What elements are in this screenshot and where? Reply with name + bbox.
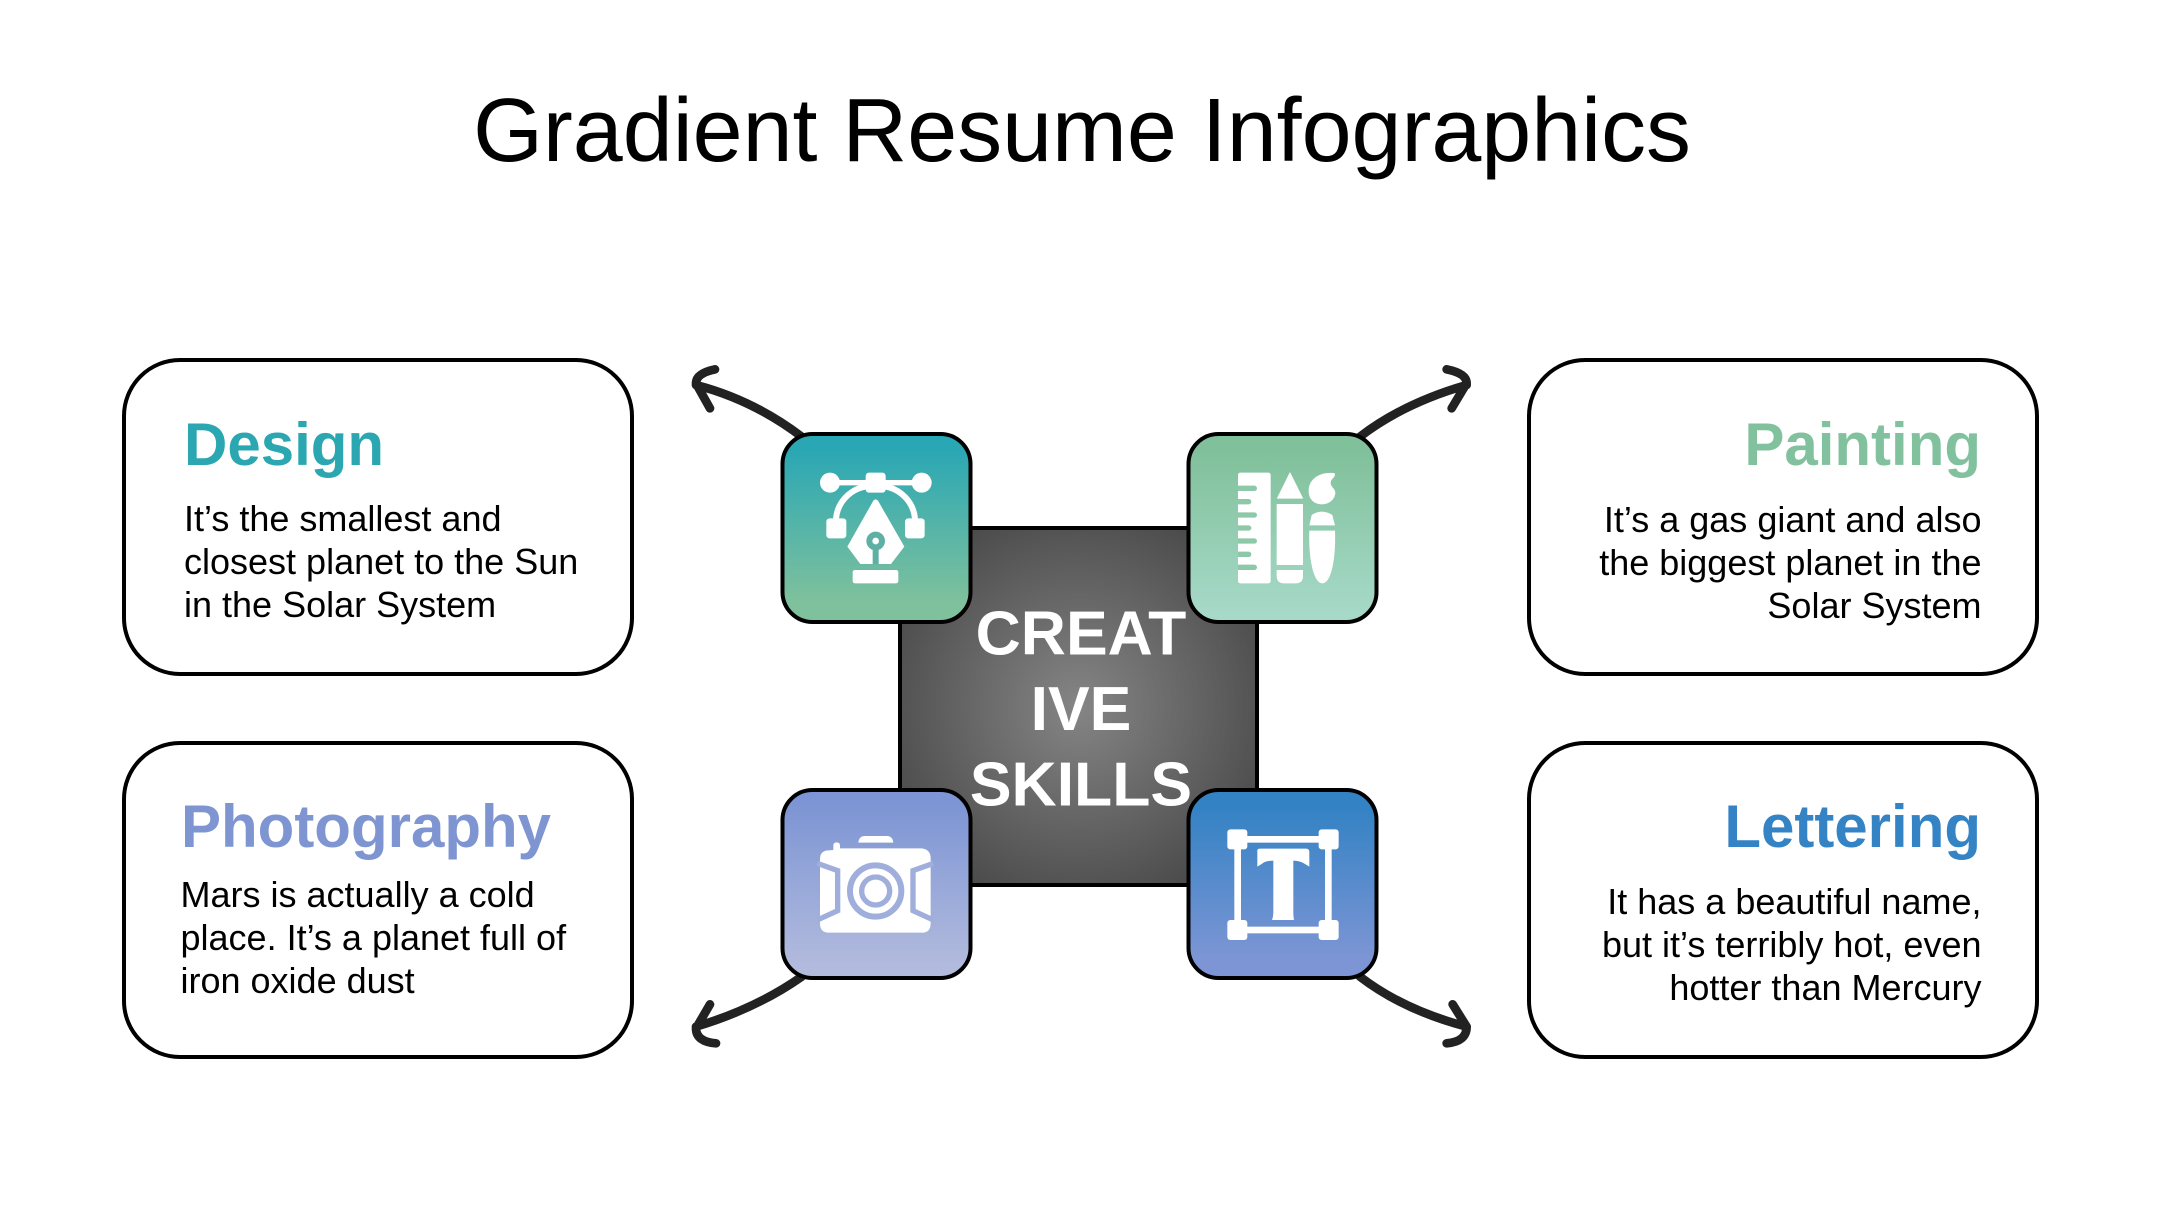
arrow: to painting: [1360, 369, 1467, 437]
text: photography description: iron oxide dust: [180, 960, 415, 1001]
center label: IVE: [1031, 674, 1131, 744]
arrow: to lettering: [1360, 977, 1467, 1043]
text: painting description: It’s a gas giant and also: [1604, 499, 1982, 540]
heading: lettering: Lettering: [1724, 793, 1981, 860]
text: painting description: Solar System: [1767, 585, 1982, 626]
center square: creative skills: [900, 528, 1257, 885]
arrow: to design: [696, 369, 802, 437]
title: Gradient Resume Infographics: [473, 81, 1691, 181]
text: design description: It’s the smallest and: [184, 498, 502, 539]
text: lettering description: hotter than Mercury: [1669, 967, 1982, 1008]
arrow: to photography: [696, 977, 802, 1043]
panel: lettering: [1529, 743, 2037, 1057]
panel: painting: [1529, 360, 2037, 674]
text: painting description: [1599, 499, 1982, 626]
panel: design: [124, 360, 632, 674]
panel: photography: [124, 743, 632, 1057]
text: lettering description: but it’s terribly hot, even: [1602, 924, 1982, 965]
icon: pen tool: [782, 434, 970, 622]
icon: text frame: [1188, 790, 1376, 978]
text: painting description: the biggest planet in the: [1599, 542, 1982, 583]
center label: SKILLS: [970, 750, 1192, 820]
heading: photography: Photography: [181, 793, 552, 860]
text: photography description: place. It’s a planet full of: [180, 917, 567, 958]
text: photography description: [180, 874, 567, 1001]
text: design description: [184, 498, 578, 625]
text: photography description: Mars is actually a cold: [180, 874, 535, 915]
icon: camera: [782, 790, 970, 978]
text: design description: closest planet to the Sun: [184, 541, 578, 582]
center label: CREAT: [976, 598, 1186, 668]
icon: art tools: [1188, 434, 1376, 622]
heading: painting: Painting: [1744, 411, 1981, 478]
heading: design: Design: [184, 411, 384, 478]
text: design description: in the Solar System: [184, 584, 496, 625]
text: lettering description: [1602, 881, 1982, 1008]
center label: [970, 598, 1192, 820]
text: lettering description: It has a beautiful name,: [1607, 881, 1982, 922]
